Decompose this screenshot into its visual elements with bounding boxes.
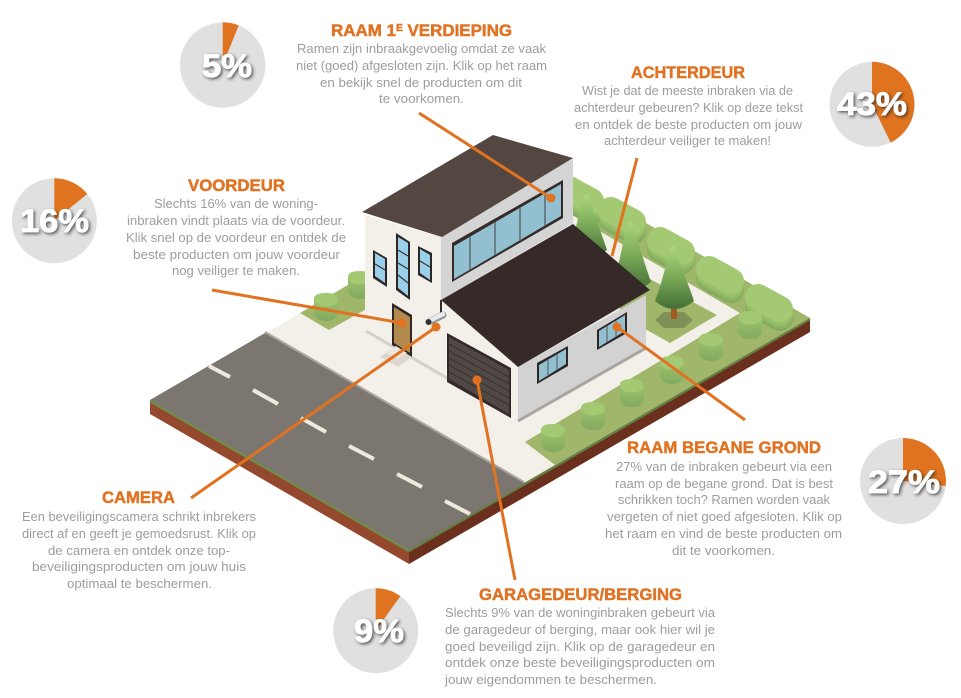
body: garagedeur/berging [444,605,716,687]
body: raam 1e verdieping: te voorkomen. [379,91,464,106]
garage door [447,333,511,418]
pie chart 27%: 27% [868,464,940,500]
pie chart 9% [333,588,418,673]
pie chart 43%: 43% [837,86,907,122]
body: raam 1e verdieping: Ramen zijn inbraakgevoelig omdat ze vaak [297,41,546,56]
body: raam begane grond: schrikken toch? Ramen worden vaak [618,492,830,507]
body: raam begane grond: het raam en vind de beste producten om [605,526,842,541]
body: garagedeur/berging: ontdek onze beste beveiligingsproducten om [445,655,715,670]
pie chart 16%: 16% [20,203,89,239]
lower right wall [518,295,646,422]
body: raam begane grond: 27% van de inbraken gebeurt via een [616,459,832,474]
body: voordeur: nog veiliger te maken. [172,263,300,278]
pie chart 16% [12,178,97,263]
front door [392,303,412,357]
body: voordeur: inbraken vindt plaats via de voordeur. [127,213,345,228]
body: raam begane grond: raam op de begane grond. Dat is best [615,476,833,491]
body: achterdeur [574,83,803,148]
text block: voordeur [126,177,346,278]
road [150,332,525,550]
text block: raam begane grond [605,439,842,558]
house front wall [365,215,518,422]
upper window [452,180,563,282]
heading: raam 1e verdieping: VERDIEPING [403,22,512,40]
pie chart 9%: 9% [354,613,404,649]
heading: raam begane grond: RAAM BEGANE GROND [627,439,821,457]
front bushes [541,311,762,452]
pie chart 5% [180,22,265,108]
body: raam 1e verdieping [296,41,547,106]
body: achterdeur: achterdeur gebeuren? Klik op deze tekst [574,100,803,115]
pie chart 43% [830,62,914,147]
body: camera: direct af en geeft je gemoedsrust. Klik op [22,526,256,541]
body: camera: optimaal te beschermen. [67,576,212,591]
heading: raam 1e verdieping: RAAM 1 [331,22,394,40]
trees [570,194,694,328]
camera [426,300,443,325]
text block: raam 1e verdieping [296,22,547,106]
heading: camera: CAMERA [102,489,175,507]
heading: raam 1e verdieping: E [396,23,403,34]
body: raam begane grond [605,459,842,558]
lawn right [620,263,717,343]
tall window [396,233,410,300]
body: voordeur: Slechts 16% van de woning- [154,196,318,211]
body: achterdeur: achterdeur veiliger te maken! [604,133,771,148]
body: camera: de camera en ontdek onze top- [48,543,230,558]
ground floor window left [537,346,568,384]
body: camera: Een beveiligingscamera schrikt inbrekers [22,509,256,524]
body: garagedeur/berging: goed beveiligd zijn. Klik op de garagedeur en [445,639,715,654]
body: voordeur: beste producten om jouw voordeur [133,247,341,262]
pointer: achterdeur [612,158,637,256]
pie chart 5%: 5% [202,48,252,84]
small left window [373,250,387,287]
isometric house scene [150,135,810,564]
text block: camera [22,489,256,591]
body: voordeur: Klik snel op de voordeur en ontdek de [126,230,346,245]
body: raam begane grond: dit te voorkomen. [672,543,775,558]
pointer: voordeur [212,290,406,328]
pointer: camera [191,322,440,498]
body: voordeur [126,196,346,278]
text block: achterdeur [574,64,803,148]
wall base [366,331,447,378]
lower roof [441,224,650,367]
lawn left [300,271,372,330]
pointer: raam 1e verdieping [419,113,556,202]
body: achterdeur: Wist je dat de meeste inbraken via de [582,83,793,98]
small right window [418,246,432,283]
text block: garagedeur/berging [444,586,716,687]
body: camera: beveiligingsproducten om jouw huis [32,559,246,574]
ground slab [150,168,810,564]
pointer: raam begane grond [612,322,745,420]
body: raam 1e verdieping: niet (goed) afgesloten zijn. Klik op het raam [296,58,547,73]
body: achterdeur: en ontdek de beste producten om jouw [575,117,802,132]
heading: achterdeur: ACHTERDEUR [631,64,745,82]
lower wall base [518,348,646,421]
body: camera [22,509,256,591]
heading: voordeur: VOORDEUR [188,177,285,195]
body: garagedeur/berging: de garagedeur of berging, maar ook hier wil je [445,622,715,637]
heading: garagedeur/berging: GARAGEDEUR/BERGING [479,586,682,604]
body: raam 1e verdieping: en bekijk snel de producten om dit [320,75,522,90]
steps [380,346,412,367]
upper roof [362,135,573,237]
left bushes [314,271,372,321]
garden strip [525,168,810,465]
pie chart 27% [860,438,946,524]
pointer: garagedeur [472,376,515,580]
upper side wall [441,158,573,300]
body: raam begane grond: vergeten of niet goed afgesloten. Klik op [607,509,842,524]
hedges [569,189,780,318]
body: garagedeur/berging: jouw eigendommen te beschermen. [444,672,657,687]
body: garagedeur/berging: Slechts 9% van de woninginbraken gebeurt via [445,605,716,620]
house [362,135,650,422]
ground floor window right [597,312,627,350]
